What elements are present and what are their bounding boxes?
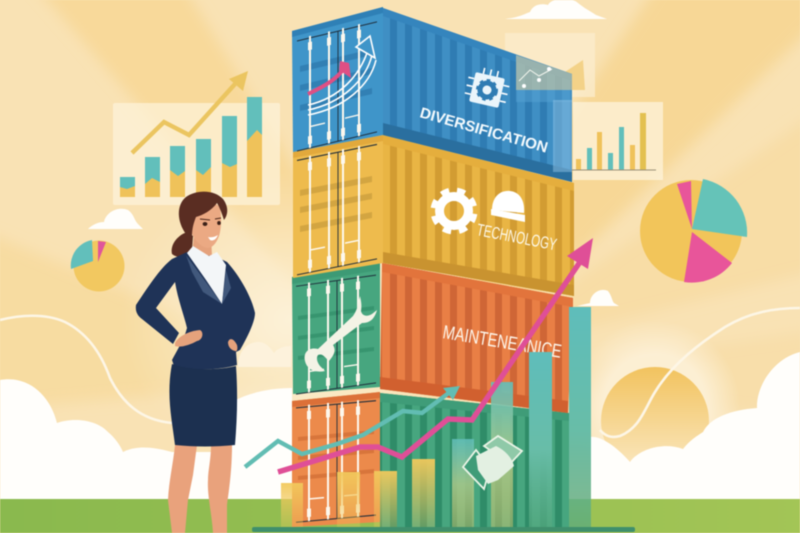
translucent chart overlay: [516, 55, 572, 172]
container: diversification blue: [292, 7, 572, 182]
front rising bars: [281, 307, 591, 529]
icon: microchip with gear: [463, 65, 512, 109]
cloud: behind pink arrow: [577, 290, 619, 306]
cloud: left small: [88, 209, 143, 229]
icon: wrench: [305, 296, 377, 372]
container: technology yellow: [293, 135, 574, 296]
ground: [0, 499, 800, 533]
label: technology: TECHNOLOGY: [475, 220, 558, 254]
left pie chart: [71, 240, 124, 292]
label: maintenance: MAINTENEANICE: [441, 322, 563, 363]
hair: [179, 192, 227, 236]
faint chart panel behind top container: [505, 33, 595, 97]
label: diversification: DIVERSIFICATION: [418, 104, 550, 157]
woman in navy suit: [136, 192, 255, 533]
decorative white curves: [0, 308, 800, 437]
container stack: [292, 7, 574, 527]
container: bottom green and orange: [292, 392, 569, 527]
teal trend arrow: [245, 386, 460, 467]
ponytail: [172, 232, 193, 257]
legs: [168, 445, 232, 533]
jacket: [136, 252, 255, 369]
handshake icon: [463, 436, 522, 489]
clouds: lower right: [591, 352, 800, 499]
eyes and smile: [200, 218, 221, 240]
lapels: [186, 255, 231, 304]
hands: [175, 330, 237, 351]
clouds: lower left: [0, 342, 295, 499]
base shadow bar: [252, 527, 635, 532]
container: maintenance orange: [292, 263, 573, 413]
right pie chart: [640, 179, 747, 283]
face: [188, 202, 221, 248]
left bar chart: [113, 71, 280, 205]
sun: [570, 320, 740, 490]
icon: hard hat: [491, 191, 525, 222]
skirt: [169, 364, 237, 446]
pink trend arrow: [278, 238, 593, 472]
neck: [192, 236, 212, 262]
blouse: [187, 246, 226, 304]
right bar chart: [570, 102, 663, 180]
cloud: top: [505, 0, 607, 19]
icon: gear: [431, 188, 477, 234]
icon: rising arrows on door: [308, 36, 376, 115]
